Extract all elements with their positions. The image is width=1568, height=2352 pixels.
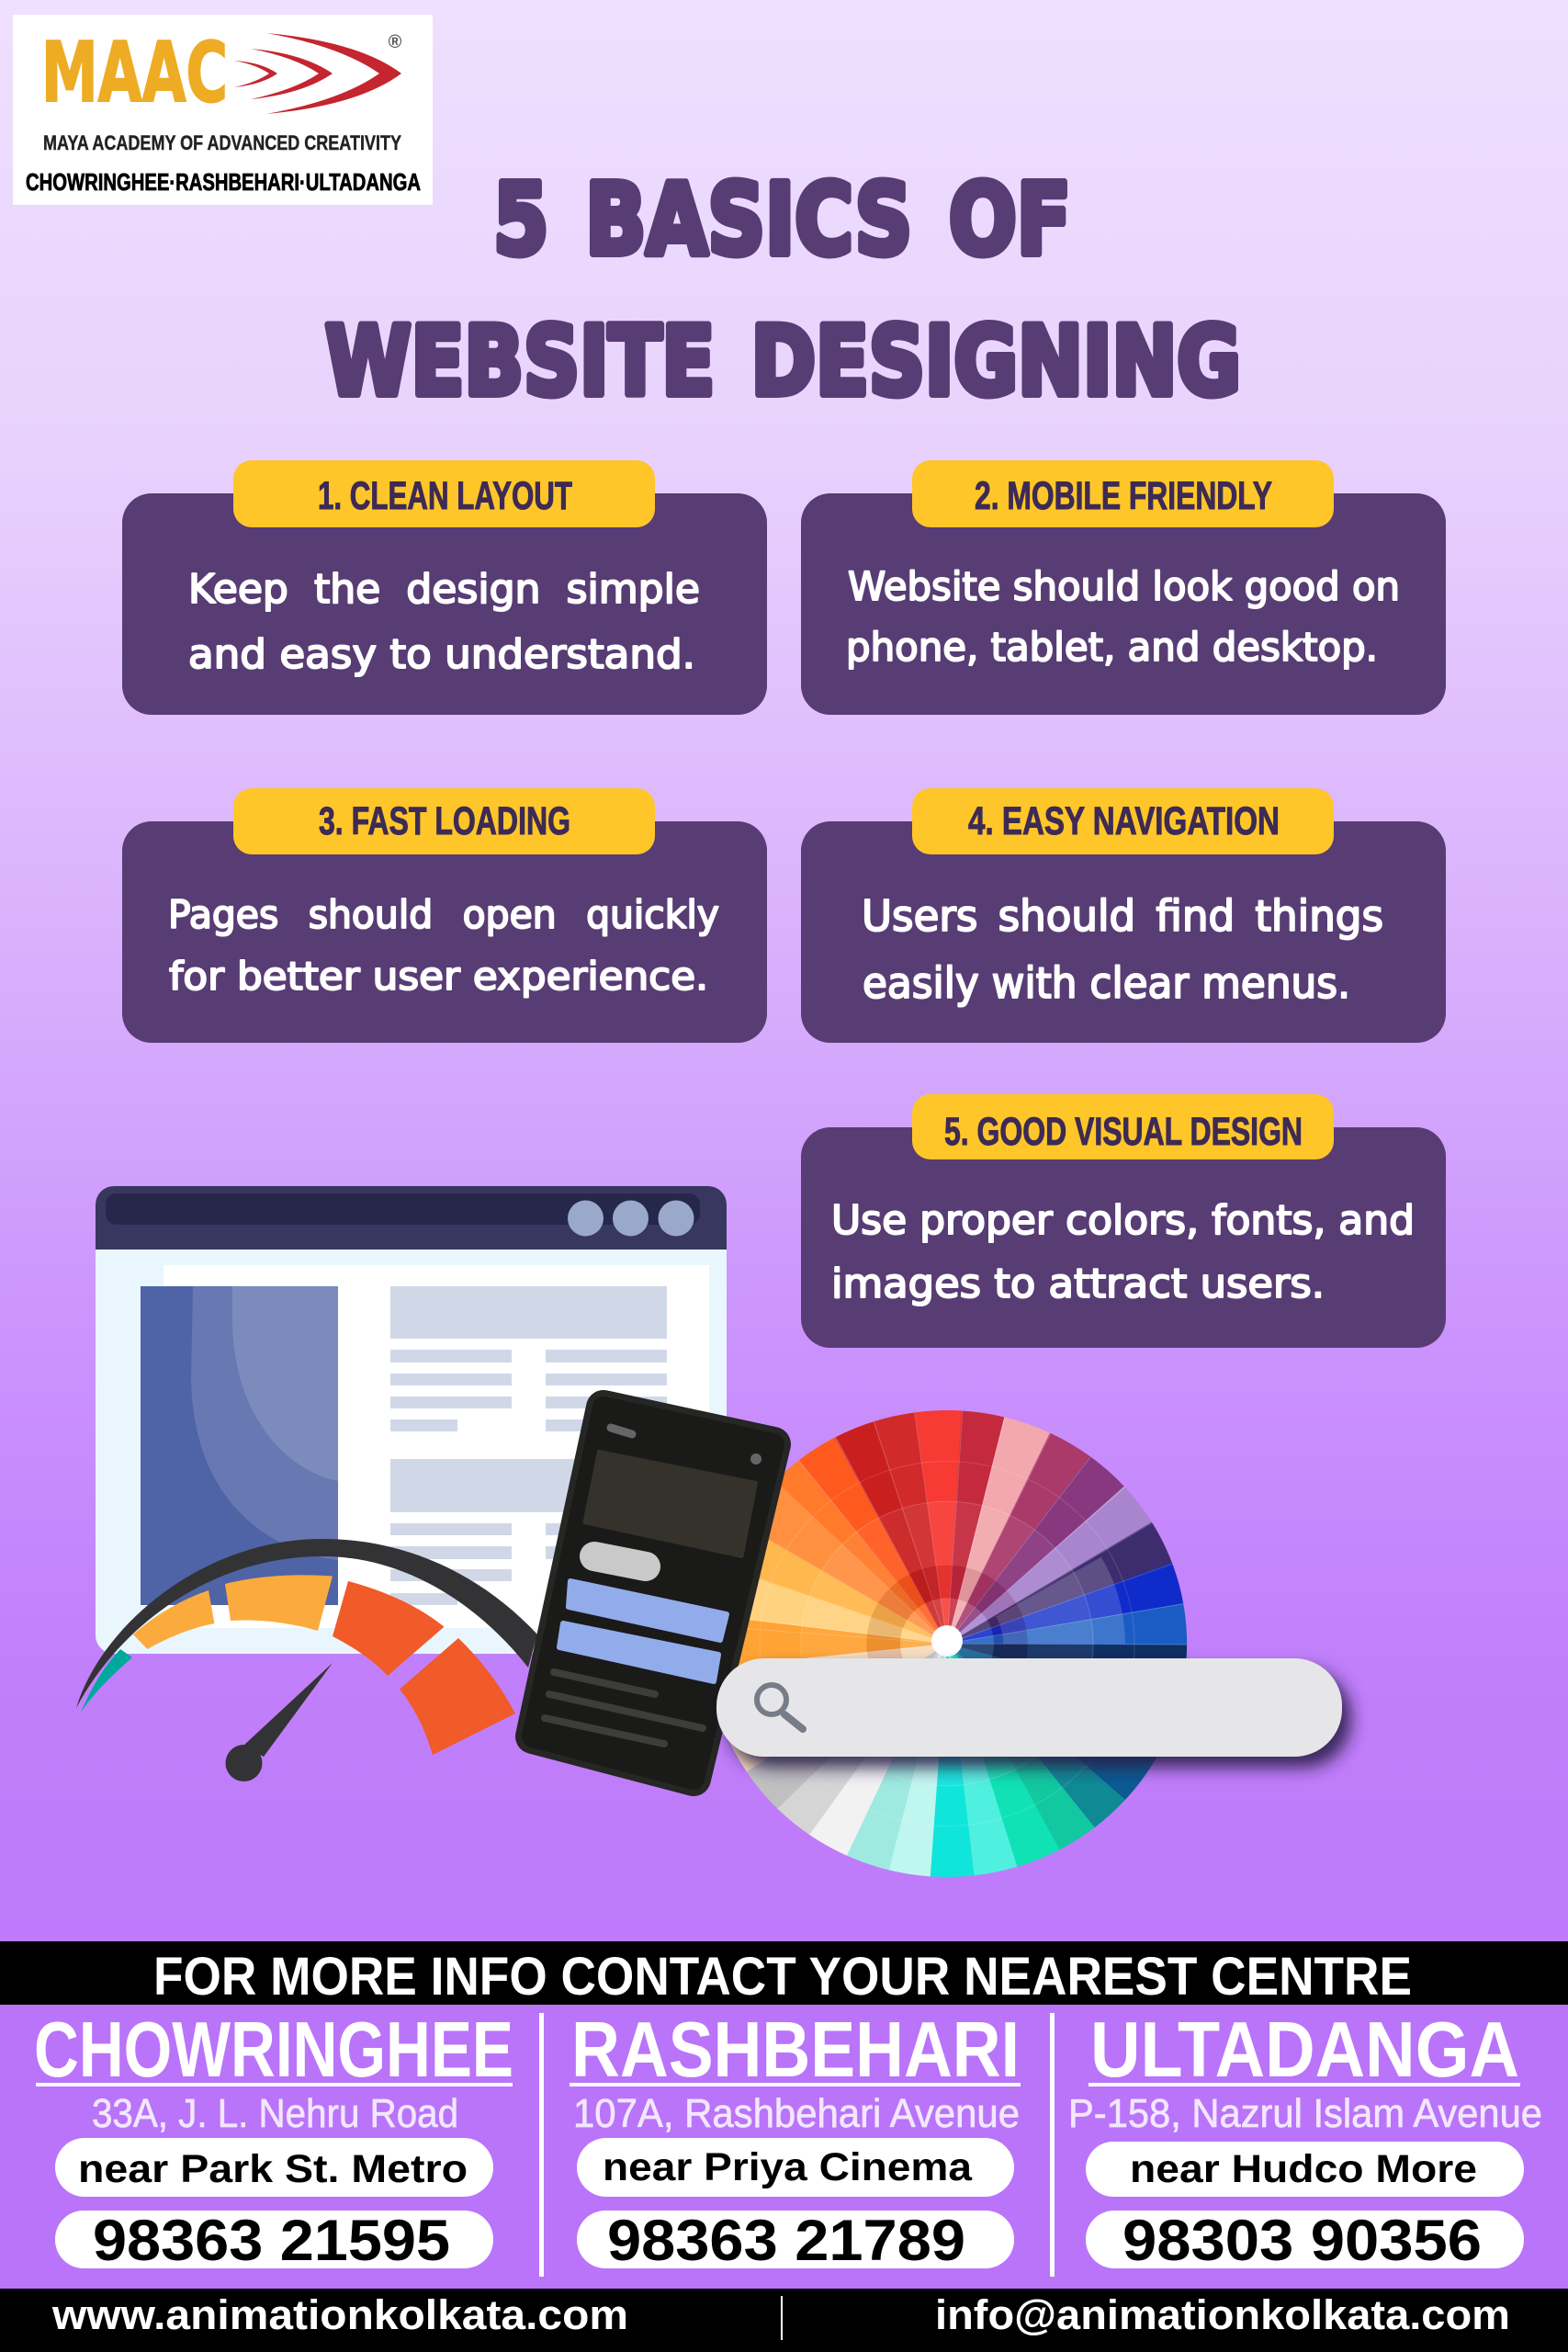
content placeholders — [390, 1286, 667, 1605]
website: www.animationkolkata.com — [51, 2291, 628, 2338]
panel: easy navigation — [801, 788, 1446, 1043]
body text: Users should find things — [862, 891, 1383, 941]
address: P-158, Nazrul Islam Avenue — [1068, 2091, 1542, 2136]
body text: images to attract users. — [831, 1261, 1325, 1307]
label: easy navigation: 4. EASY NAVIGATION — [968, 799, 1280, 843]
column dividers — [539, 2013, 1055, 2277]
address: 33A, J. L. Nehru Road — [92, 2091, 458, 2136]
illustration: browser window — [96, 1186, 727, 1654]
contact section background — [0, 2005, 1568, 2289]
body text — [188, 566, 700, 678]
phone pill: 98303 90356 — [1122, 2209, 1482, 2273]
registered mark: ® — [389, 32, 402, 52]
gauge arc — [76, 1539, 537, 1708]
logo tagline: MAYA ACADEMY OF ADVANCED CREATIVITY — [43, 131, 401, 154]
title: 5 BASICS OF — [493, 164, 1071, 277]
phone pill button — [594, 1556, 646, 1566]
phone pill: 98363 21789 — [607, 2209, 965, 2273]
phone text lines — [545, 1672, 703, 1744]
body text: Keep the design simple — [188, 566, 700, 613]
title — [325, 164, 1241, 417]
centre: Chowringhee: CHOWRINGHEE — [34, 2007, 513, 2094]
body text: phone, tablet, and desktop. — [846, 625, 1378, 671]
body text — [168, 892, 719, 999]
label: mobile friendly: 2. MOBILE FRIENDLY — [975, 474, 1272, 518]
centre: Ultadanga: ULTADANGA — [1090, 2007, 1519, 2094]
phone screen image — [584, 1452, 756, 1556]
body text: Website should look good on — [848, 564, 1400, 610]
panel: good visual design — [801, 1094, 1446, 1348]
illustration: colour fan — [760, 1462, 1134, 1826]
body text — [862, 891, 1383, 1008]
panel: mobile friendly — [801, 460, 1446, 715]
centre: Chowringhee — [34, 2007, 513, 2273]
window buttons — [568, 1200, 694, 1237]
logo: MAAC — [13, 15, 433, 205]
logo centres: CHOWRINGHEE·RASHBEHARI·ULTADANGA — [26, 168, 421, 196]
address: 107A, Rashbehari Avenue — [573, 2091, 1020, 2136]
body text: and easy to understand. — [188, 631, 695, 678]
gauge needle — [226, 1663, 333, 1781]
body text: for better user experience. — [169, 954, 708, 999]
body text: easily with clear menus. — [863, 958, 1350, 1008]
landmark pill — [577, 2138, 1014, 2197]
body text — [831, 1197, 1415, 1307]
centre: Rashbehari: RASHBEHARI — [571, 2007, 1020, 2094]
landmark pill — [1086, 2142, 1524, 2197]
phone blue bars — [559, 1581, 727, 1681]
centre: Ultadanga — [1068, 2007, 1542, 2273]
logo chevrons — [234, 33, 401, 114]
illustration: speed gauge — [76, 1539, 537, 1781]
phone pill: 98363 21595 — [93, 2209, 450, 2273]
body text: Use proper colors, fonts, and — [831, 1197, 1415, 1244]
body text: Pages should open quickly — [168, 892, 719, 937]
landmark pill: near Hudco More — [1130, 2147, 1477, 2191]
phone camera — [750, 1453, 761, 1464]
email: info@animationkolkata.com — [935, 2291, 1510, 2338]
landmark pill: near Park St. Metro — [78, 2147, 468, 2191]
icon: magnifier — [757, 1685, 803, 1729]
hero image block — [141, 1286, 338, 1605]
phone speaker — [611, 1428, 632, 1434]
landmark pill — [55, 2138, 493, 2197]
panel: clean layout — [122, 460, 767, 715]
gauge segments — [81, 1575, 515, 1755]
illustration: search bar — [716, 1658, 1342, 1757]
logo wordmark: MAAC — [41, 25, 228, 121]
label: clean layout: 1. CLEAN LAYOUT — [318, 474, 572, 518]
label: fast loading: 3. FAST LOADING — [319, 799, 570, 843]
label: good visual design: 5. GOOD VISUAL DESIGN — [944, 1110, 1303, 1154]
landmark pill: near Priya Cinema — [603, 2145, 973, 2189]
footer bar — [0, 2289, 1568, 2352]
panel: fast loading — [122, 788, 767, 1043]
illustration: smartphone — [533, 1408, 773, 1779]
fan pivot — [931, 1625, 963, 1657]
centre: Rashbehari — [570, 2007, 1021, 2273]
contact banner: FOR MORE INFO CONTACT YOUR NEAREST CENTRE — [153, 1947, 1412, 2007]
title: WEBSITE DESIGNING — [325, 307, 1241, 417]
body text — [846, 564, 1400, 671]
